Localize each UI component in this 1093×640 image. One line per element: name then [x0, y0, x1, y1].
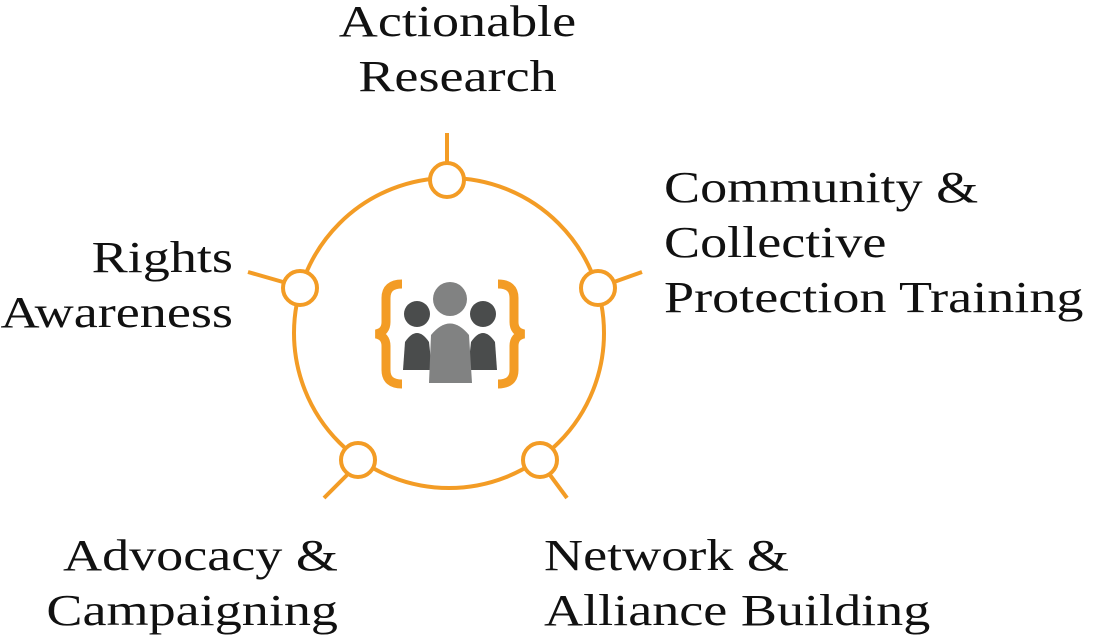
- label: Community & Collective Protection Training: Community &: [664, 163, 978, 212]
- label: Actionable Research: Research: [358, 52, 557, 101]
- label: Rights Awareness: Awareness: [1, 288, 233, 337]
- label: Community & Collective Protection Training: Collective: [664, 218, 886, 267]
- label: Actionable Research: [339, 0, 576, 101]
- label: Community & Collective Protection Training: Protection Training: [664, 273, 1083, 322]
- label: Network & Alliance Building: [544, 531, 930, 635]
- label: Community & Collective Protection Training: [664, 163, 1083, 322]
- label: Rights Awareness: Rights: [92, 233, 233, 282]
- label: Network & Alliance Building: Network &: [544, 531, 789, 580]
- label: Rights Awareness: [1, 233, 233, 337]
- icon: people in braces: [376, 282, 524, 384]
- label: Advocacy & Campaigning: Campaigning: [46, 586, 338, 635]
- label: Advocacy & Campaigning: Advocacy &: [63, 531, 338, 580]
- label: Advocacy & Campaigning: [46, 531, 338, 635]
- label: Network & Alliance Building: Alliance Building: [544, 586, 930, 635]
